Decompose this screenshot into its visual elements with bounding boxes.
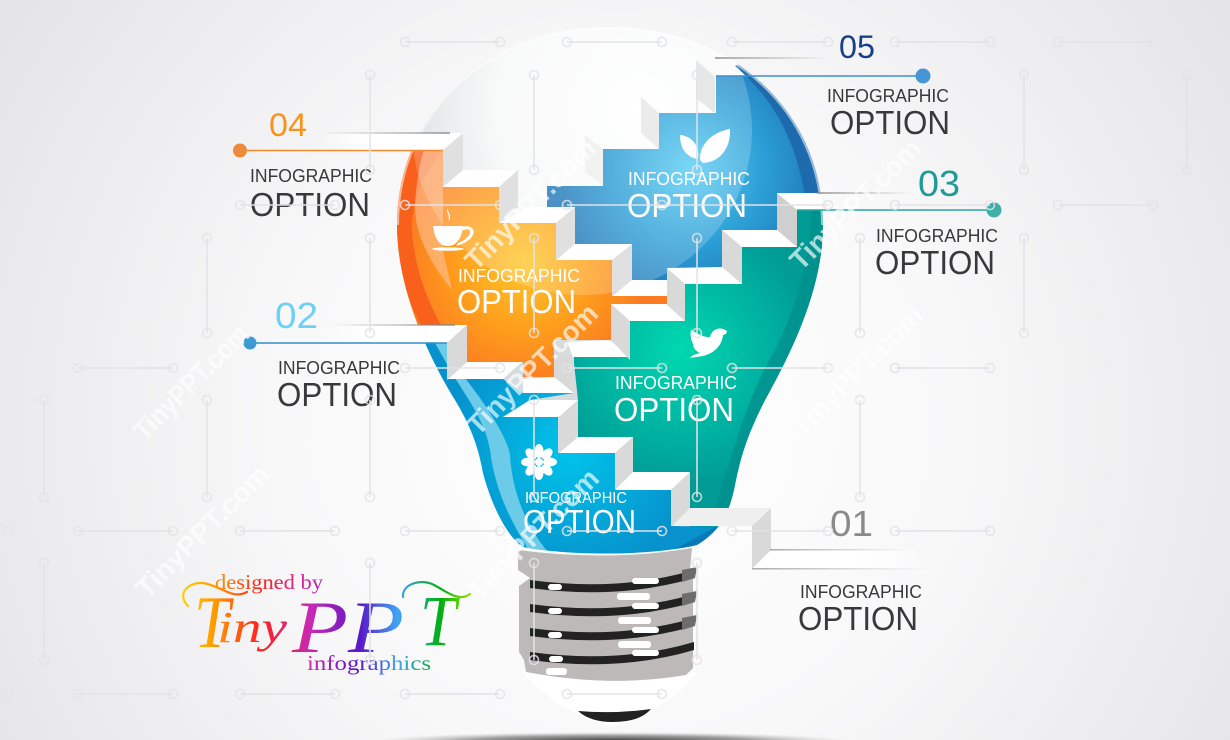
label: option 03: 03 — [918, 163, 960, 204]
inner label: cyan segment — [523, 490, 636, 540]
inner label: teal segment: OPTION — [614, 391, 734, 428]
label: option 03 — [875, 163, 998, 281]
label: option 04: 04 — [269, 107, 307, 143]
inner label: orange segment: INFOGRAPHIC — [458, 266, 580, 286]
glass highlight — [414, 64, 752, 295]
watermarks: TinyPPT.com — [461, 298, 604, 441]
label: option 04: INFOGRAPHIC — [250, 166, 372, 186]
icon: light bulb — [397, 60, 823, 722]
label: option 02: 02 — [275, 295, 318, 336]
watermarks: TinyPPT.com — [784, 133, 927, 276]
peach band on orange — [415, 150, 452, 290]
watermarks: TinyPPT.com — [462, 463, 605, 606]
icon: bird — [690, 329, 727, 358]
logo: designed by TinyPPT infographics: infographics — [307, 651, 431, 675]
inner label: orange segment — [457, 266, 580, 320]
icon: leaf — [680, 129, 730, 163]
label: option 01 — [798, 503, 922, 637]
coloured segments — [397, 64, 823, 554]
segment 02 and 01 blue — [425, 344, 718, 554]
inner label: teal segment: INFOGRAPHIC — [615, 373, 737, 393]
logo: designed by TinyPPT infographics: T — [420, 581, 460, 661]
leader line 04 — [233, 144, 443, 158]
label: option 05 — [827, 29, 950, 141]
ground shadow — [377, 732, 847, 740]
label: option 03: OPTION — [875, 244, 995, 281]
logo: designed by TinyPPT infographics: T — [194, 582, 234, 664]
segment 04 orange — [380, 150, 667, 377]
inner label: teal segment — [614, 373, 737, 428]
watermarks: TinyPPT.com — [127, 318, 255, 446]
label: option 02: OPTION — [277, 376, 397, 413]
watermarks: TinyPPT.com — [129, 458, 275, 604]
label: option 01: INFOGRAPHIC — [800, 582, 922, 602]
label: option 02 — [275, 295, 400, 413]
logo swashes — [183, 582, 470, 606]
label: option 04: OPTION — [250, 186, 370, 223]
segment 05 blue — [547, 76, 820, 280]
inner label: blue segment: OPTION — [627, 187, 747, 224]
leader line 05 — [716, 68, 930, 84]
icon: flower — [521, 444, 557, 480]
label: option 02: INFOGRAPHIC — [278, 358, 400, 378]
label: option 01: 01 — [830, 503, 873, 544]
bulb socket — [518, 548, 697, 726]
logo: designed by TinyPPT infographics: designed by — [215, 570, 324, 594]
logo: designed by TinyPPT infographics — [183, 570, 470, 675]
watermarks: TinyPPT.com — [459, 133, 602, 276]
watermarks: TinyPPT.com — [786, 300, 929, 443]
leader line 02 — [244, 336, 447, 350]
watermarks — [127, 133, 929, 606]
label: option 04 — [250, 107, 372, 223]
label: option 05: 05 — [839, 29, 875, 65]
stair ledges outside bulb — [320, 57, 927, 570]
label: option 01: OPTION — [798, 600, 918, 637]
inner label: blue segment — [627, 169, 750, 224]
leader line 03 — [797, 202, 1002, 218]
inner label: blue segment: INFOGRAPHIC — [628, 169, 750, 189]
label: option 05: INFOGRAPHIC — [827, 86, 949, 106]
inner label: orange segment: OPTION — [457, 283, 576, 320]
logo: designed by TinyPPT infographics: iny — [217, 603, 288, 652]
inner label: cyan segment: INFOGRAPHIC — [525, 490, 627, 507]
glass rim — [397, 64, 823, 225]
inner label: cyan segment: OPTION — [523, 503, 636, 540]
label: option 03: INFOGRAPHIC — [876, 226, 998, 246]
logo: designed by TinyPPT infographics: PP — [291, 587, 404, 669]
segment 03 teal — [574, 210, 840, 530]
bulb glass — [397, 27, 823, 554]
label: option 05: OPTION — [830, 104, 950, 141]
icon: coffee cup — [432, 208, 474, 251]
stair steps — [443, 60, 822, 490]
